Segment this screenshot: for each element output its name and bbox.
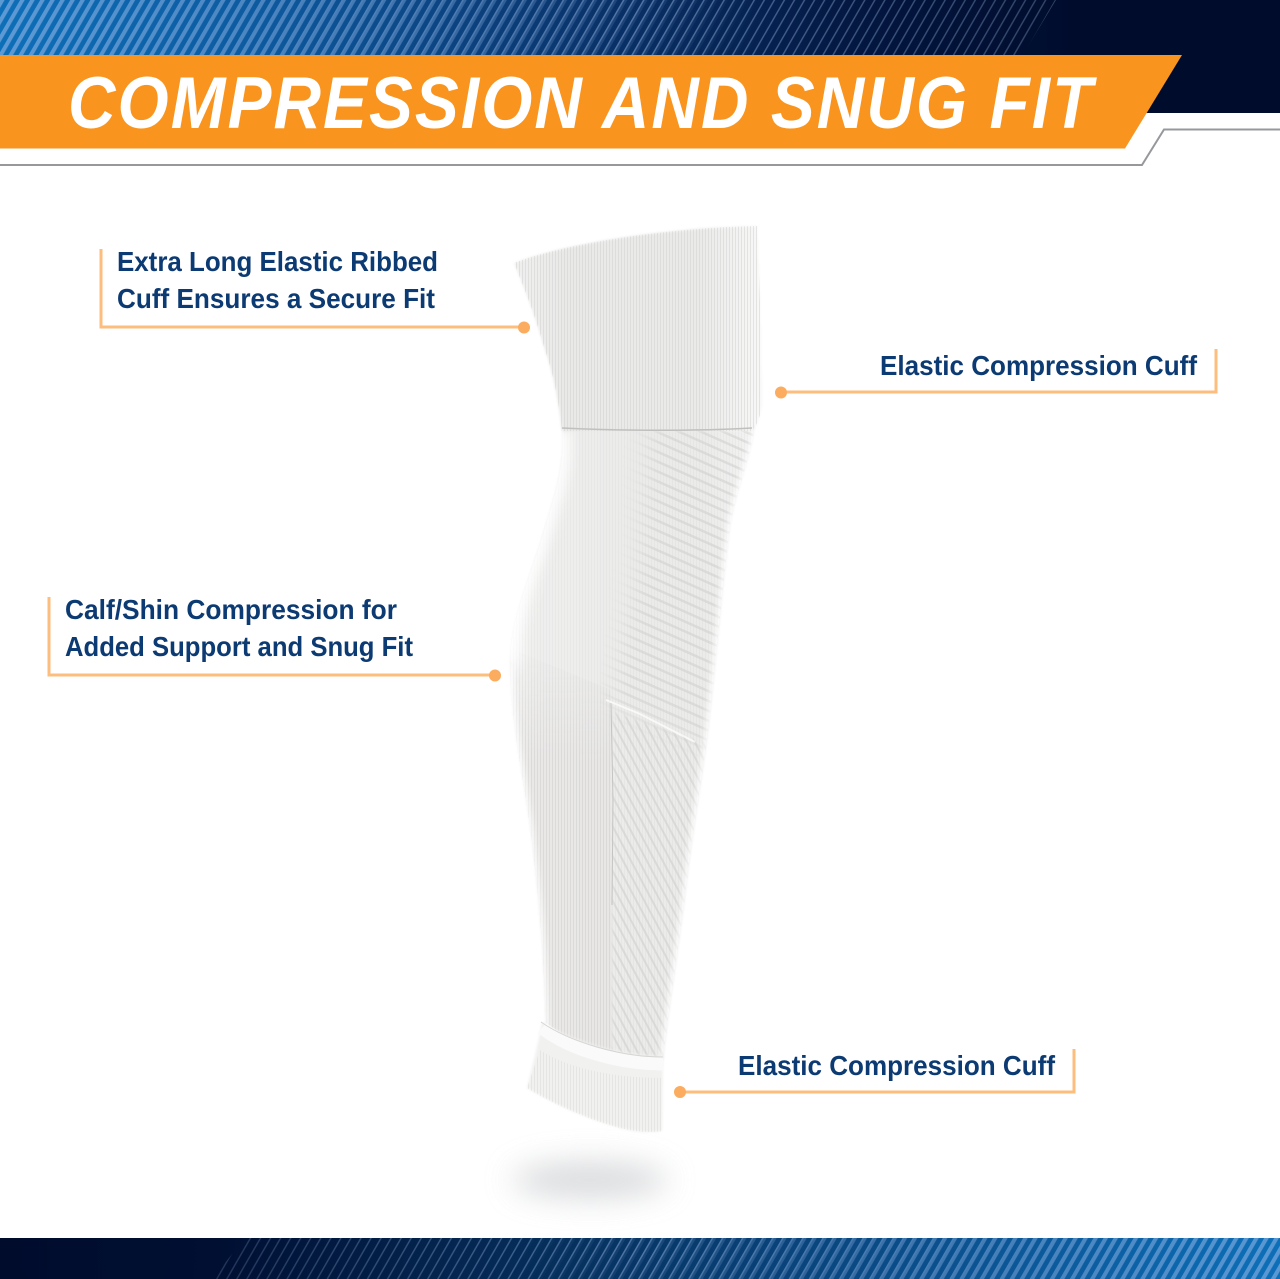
callout: extra long cuff: Cuff Ensures a Secure Fit [117, 283, 435, 314]
callout: calf and shin compression: Calf/Shin Compression for [65, 594, 397, 625]
upper ribbed cuff [514, 226, 762, 431]
callout: upper elastic compression cuff [775, 349, 1216, 398]
header outline stroke [0, 130, 1280, 165]
callout: lower elastic compression cuff [674, 1049, 1074, 1098]
calf body [510, 430, 754, 1058]
callout: calf and shin compression: Added Support and Snug Fit [65, 631, 413, 662]
sleeve shadow [512, 1161, 668, 1199]
product: white compression sleeve [500, 226, 780, 1199]
title: COMPRESSION AND SNUG FIT [68, 62, 1097, 144]
lower ankle cuff [527, 1022, 663, 1132]
top header band [0, 0, 1280, 113]
callout: upper elastic compression cuff: Elastic Compression Cuff [880, 350, 1198, 381]
callout: lower elastic compression cuff: Elastic Compression Cuff [738, 1050, 1056, 1081]
callout: extra long cuff: Extra Long Elastic Ribbed [117, 246, 438, 277]
callout: calf and shin compression [49, 594, 501, 682]
title banner [0, 55, 1182, 148]
bottom footer band [0, 1238, 1280, 1279]
callout: extra long cuff [101, 246, 530, 334]
